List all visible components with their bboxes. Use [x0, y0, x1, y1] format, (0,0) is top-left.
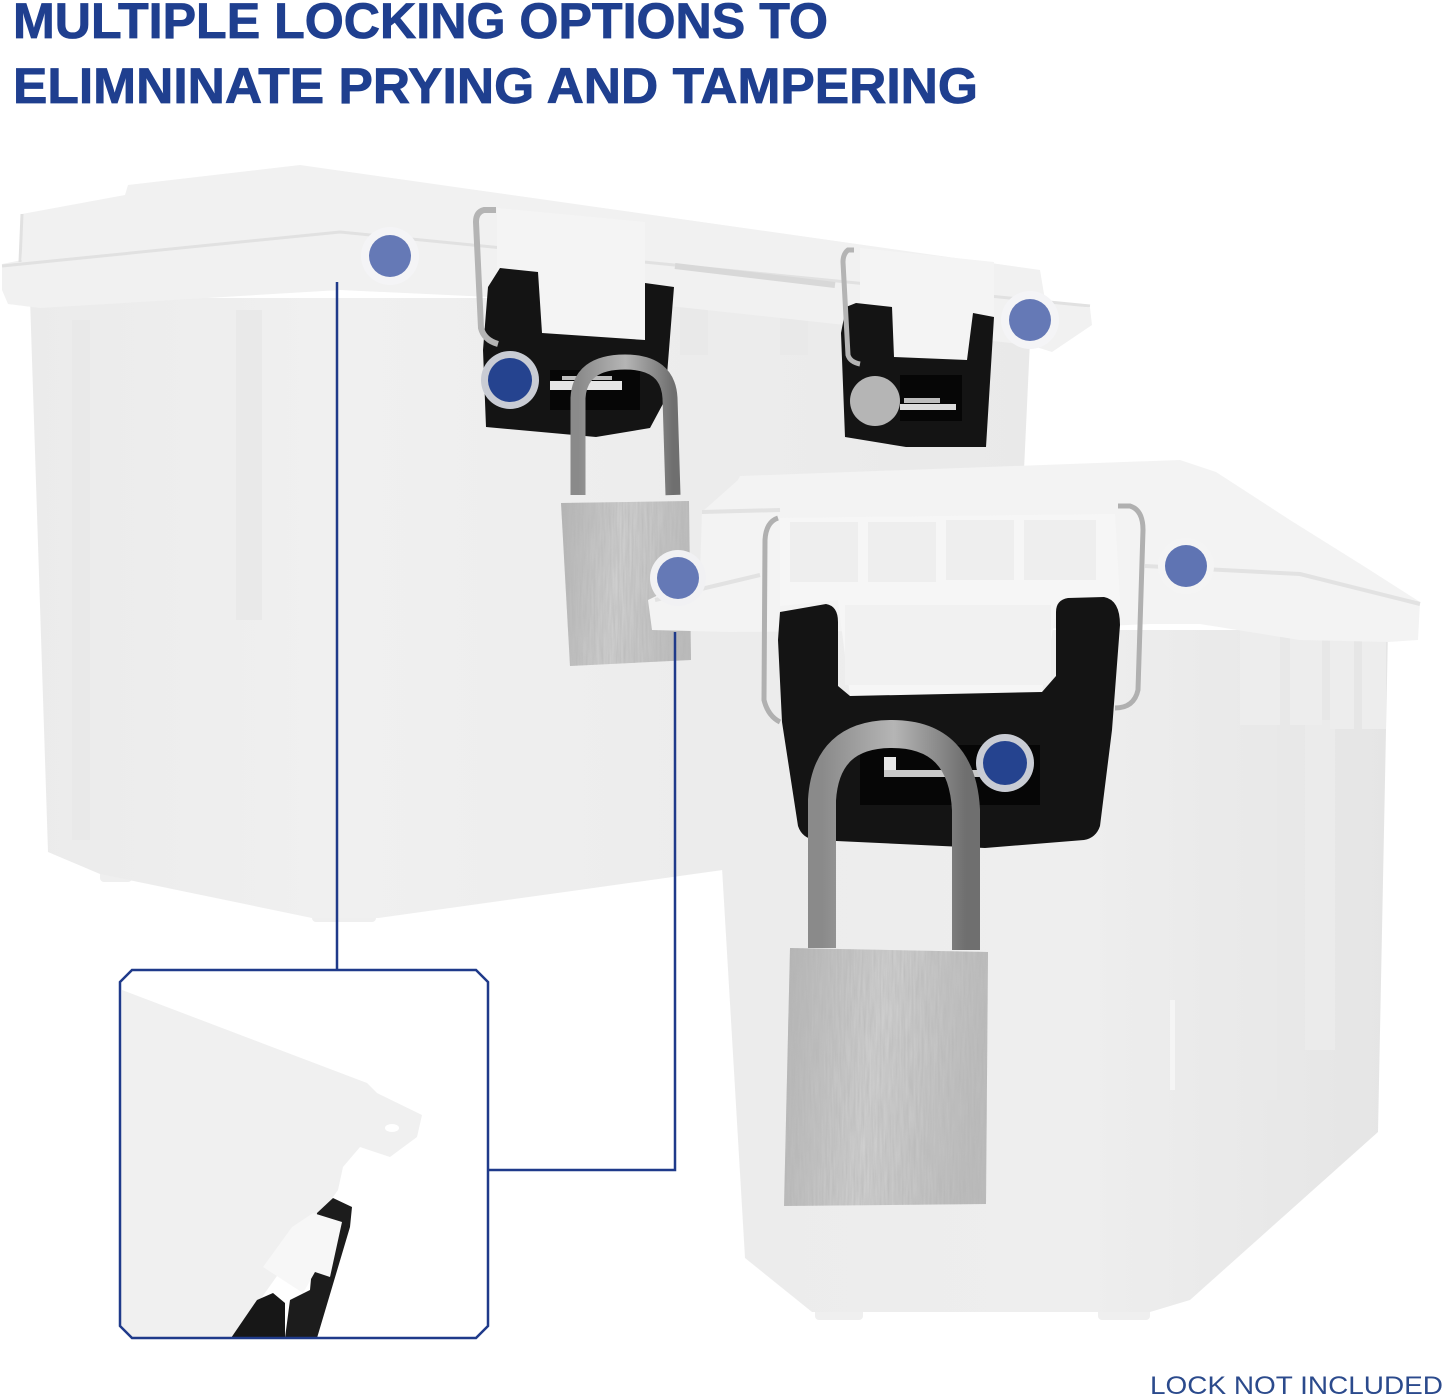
- left latch hasp: [550, 376, 622, 390]
- inset border: [120, 970, 488, 1338]
- right wire bail: [843, 250, 860, 364]
- inset tab hole: [385, 1124, 399, 1132]
- front box body: [708, 630, 1388, 1312]
- callout line: rim to inset: [336, 282, 338, 970]
- inset panel: [120, 970, 488, 1338]
- right latch recess: [900, 375, 962, 421]
- back box body: [30, 298, 1032, 918]
- back box lid edge: [2, 214, 1090, 306]
- front latch flap ribs: [790, 520, 1096, 685]
- marker: back box tab right: [1001, 291, 1059, 349]
- title: ELIMNINATE PRYING AND TAMPERING: [13, 58, 978, 114]
- front wire bail: [764, 506, 1143, 722]
- back ammo box: [2, 165, 1092, 922]
- right latch hasp: [900, 398, 956, 410]
- latch flap left: [497, 208, 645, 340]
- left black latch: [483, 268, 674, 437]
- front black latch: [778, 597, 1120, 848]
- inset latch white piece: [311, 1214, 342, 1279]
- marker: front box tab right: [1158, 538, 1214, 594]
- right black latch: [841, 303, 994, 447]
- front latch recess: [860, 745, 1040, 805]
- inset box corner: [120, 990, 422, 1338]
- marker: back latch left: [481, 351, 539, 409]
- front padlock: [784, 734, 988, 1206]
- front box lid edge: [655, 510, 1420, 604]
- back box feet: [100, 868, 376, 922]
- left latch recess: [550, 370, 640, 410]
- marker: back box rim left: [361, 227, 419, 285]
- marker: front latch: [976, 734, 1034, 792]
- back padlock: [561, 362, 691, 666]
- left wire bail: [476, 210, 498, 344]
- back box lid: [2, 165, 1092, 352]
- front box vertical ribs: [1170, 720, 1335, 1100]
- front latch flap: [780, 514, 1120, 696]
- marker: back latch right: [850, 376, 900, 426]
- inset latch black: [285, 1198, 352, 1338]
- front box lid: [648, 460, 1420, 642]
- latch flap right: [860, 248, 994, 360]
- front box right ribs: [1240, 625, 1386, 729]
- front box feet: [815, 1306, 1150, 1320]
- inset latch roller: [231, 1293, 285, 1338]
- back box ribs: [72, 305, 808, 840]
- front latch hasp: [884, 757, 984, 777]
- title: [13, 0, 978, 114]
- front ammo box: [648, 460, 1420, 1320]
- callout line: front tab to inset: [488, 632, 675, 1170]
- marker: front box tab left: [650, 550, 706, 606]
